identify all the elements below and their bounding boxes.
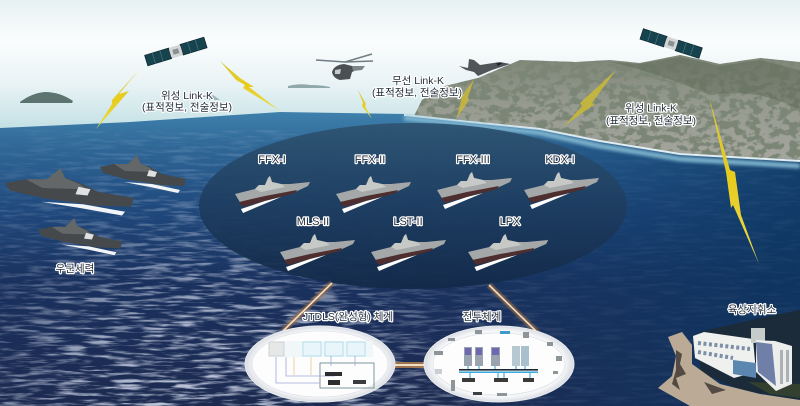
ship: MLS-II: [280, 234, 355, 271]
icon: command post building: [693, 328, 792, 391]
ship: upper allied vessel: [100, 155, 186, 193]
cabinets: [464, 346, 529, 366]
ship: LPX: [468, 234, 548, 271]
ships inside ellipse: [235, 172, 599, 271]
island cliff: [404, 55, 800, 166]
background: distant islands: [20, 84, 330, 103]
connector: ellipse to JTDLS: [283, 283, 332, 331]
connector: JTDLS to combat system: [392, 362, 426, 368]
label: MLS-II: MLS-II: [297, 216, 329, 228]
lightning: helicopter link: [358, 90, 372, 119]
label: combat system: 전투체계: [463, 311, 501, 323]
lightning: right satellite link: [564, 70, 616, 126]
allied fleet ships: [5, 155, 186, 255]
background: sea: [0, 112, 800, 406]
label: UAV Link-K: (표적정보, 전술정보): [372, 87, 462, 99]
plate: combat system: [424, 326, 574, 402]
lightning: satellite left to ellipse: [220, 61, 280, 111]
label: satellite Link-K right: (표적정보, 전술정보): [606, 115, 696, 127]
label: allied forces: 우군세력: [56, 263, 94, 275]
lightning: satellite left to fleet: [96, 70, 139, 129]
headland backdrop: [700, 310, 800, 400]
icon: helicopter: [316, 54, 373, 80]
label: JTDLS system: JTDLS(완성형) 체계: [303, 310, 393, 323]
label: satellite Link-K left: (표적정보, 전술정보): [142, 102, 232, 114]
label: FFX-III: FFX-III: [456, 154, 490, 166]
ship: FFX-III: [437, 172, 512, 209]
lightning: jet link: [457, 79, 474, 118]
ship: large allied vessel: [5, 168, 134, 216]
shore rocks: [658, 332, 800, 406]
ship: KDX-I: [524, 172, 599, 209]
lightning: right satellite to command post: [709, 97, 759, 264]
label: satellite Link-K left: [142, 89, 232, 114]
satellite: right: [640, 29, 702, 58]
network bus: [459, 366, 538, 378]
label: FFX-II: FFX-II: [355, 154, 385, 166]
label: satellite Link-K right: 위성 Link-K: [625, 102, 677, 114]
connector: ellipse to combat system: [489, 285, 538, 333]
consoles: [462, 378, 534, 382]
label: LPX: LPX: [500, 216, 521, 228]
dark rocks on the shore: [672, 350, 726, 394]
vegetation below building: [748, 382, 800, 398]
label: satellite Link-K left: 위성 Link-K: [161, 89, 213, 102]
background: sky: [0, 0, 800, 135]
label: UAV Link-K: [372, 75, 462, 99]
peripheral icons: [434, 330, 562, 396]
label: land command post: 육상지휘소: [728, 304, 776, 316]
plate: JTDLS system: [245, 326, 395, 402]
central dark ellipse: [199, 123, 627, 289]
label: FFX-I: FFX-I: [258, 154, 286, 166]
icon: fighter jet: [459, 59, 510, 76]
ship: lower allied vessel: [38, 218, 122, 255]
label: UAV Link-K: 무선 Link-K: [392, 75, 444, 87]
label: LST-II: LST-II: [393, 216, 423, 228]
label: KDX-I: KDX-I: [545, 154, 575, 166]
label: satellite Link-K right: [606, 102, 696, 127]
ship: LST-II: [371, 234, 446, 271]
satellite: left: [145, 37, 207, 66]
ship: FFX-II: [336, 176, 411, 213]
ship: FFX-I: [235, 176, 310, 213]
